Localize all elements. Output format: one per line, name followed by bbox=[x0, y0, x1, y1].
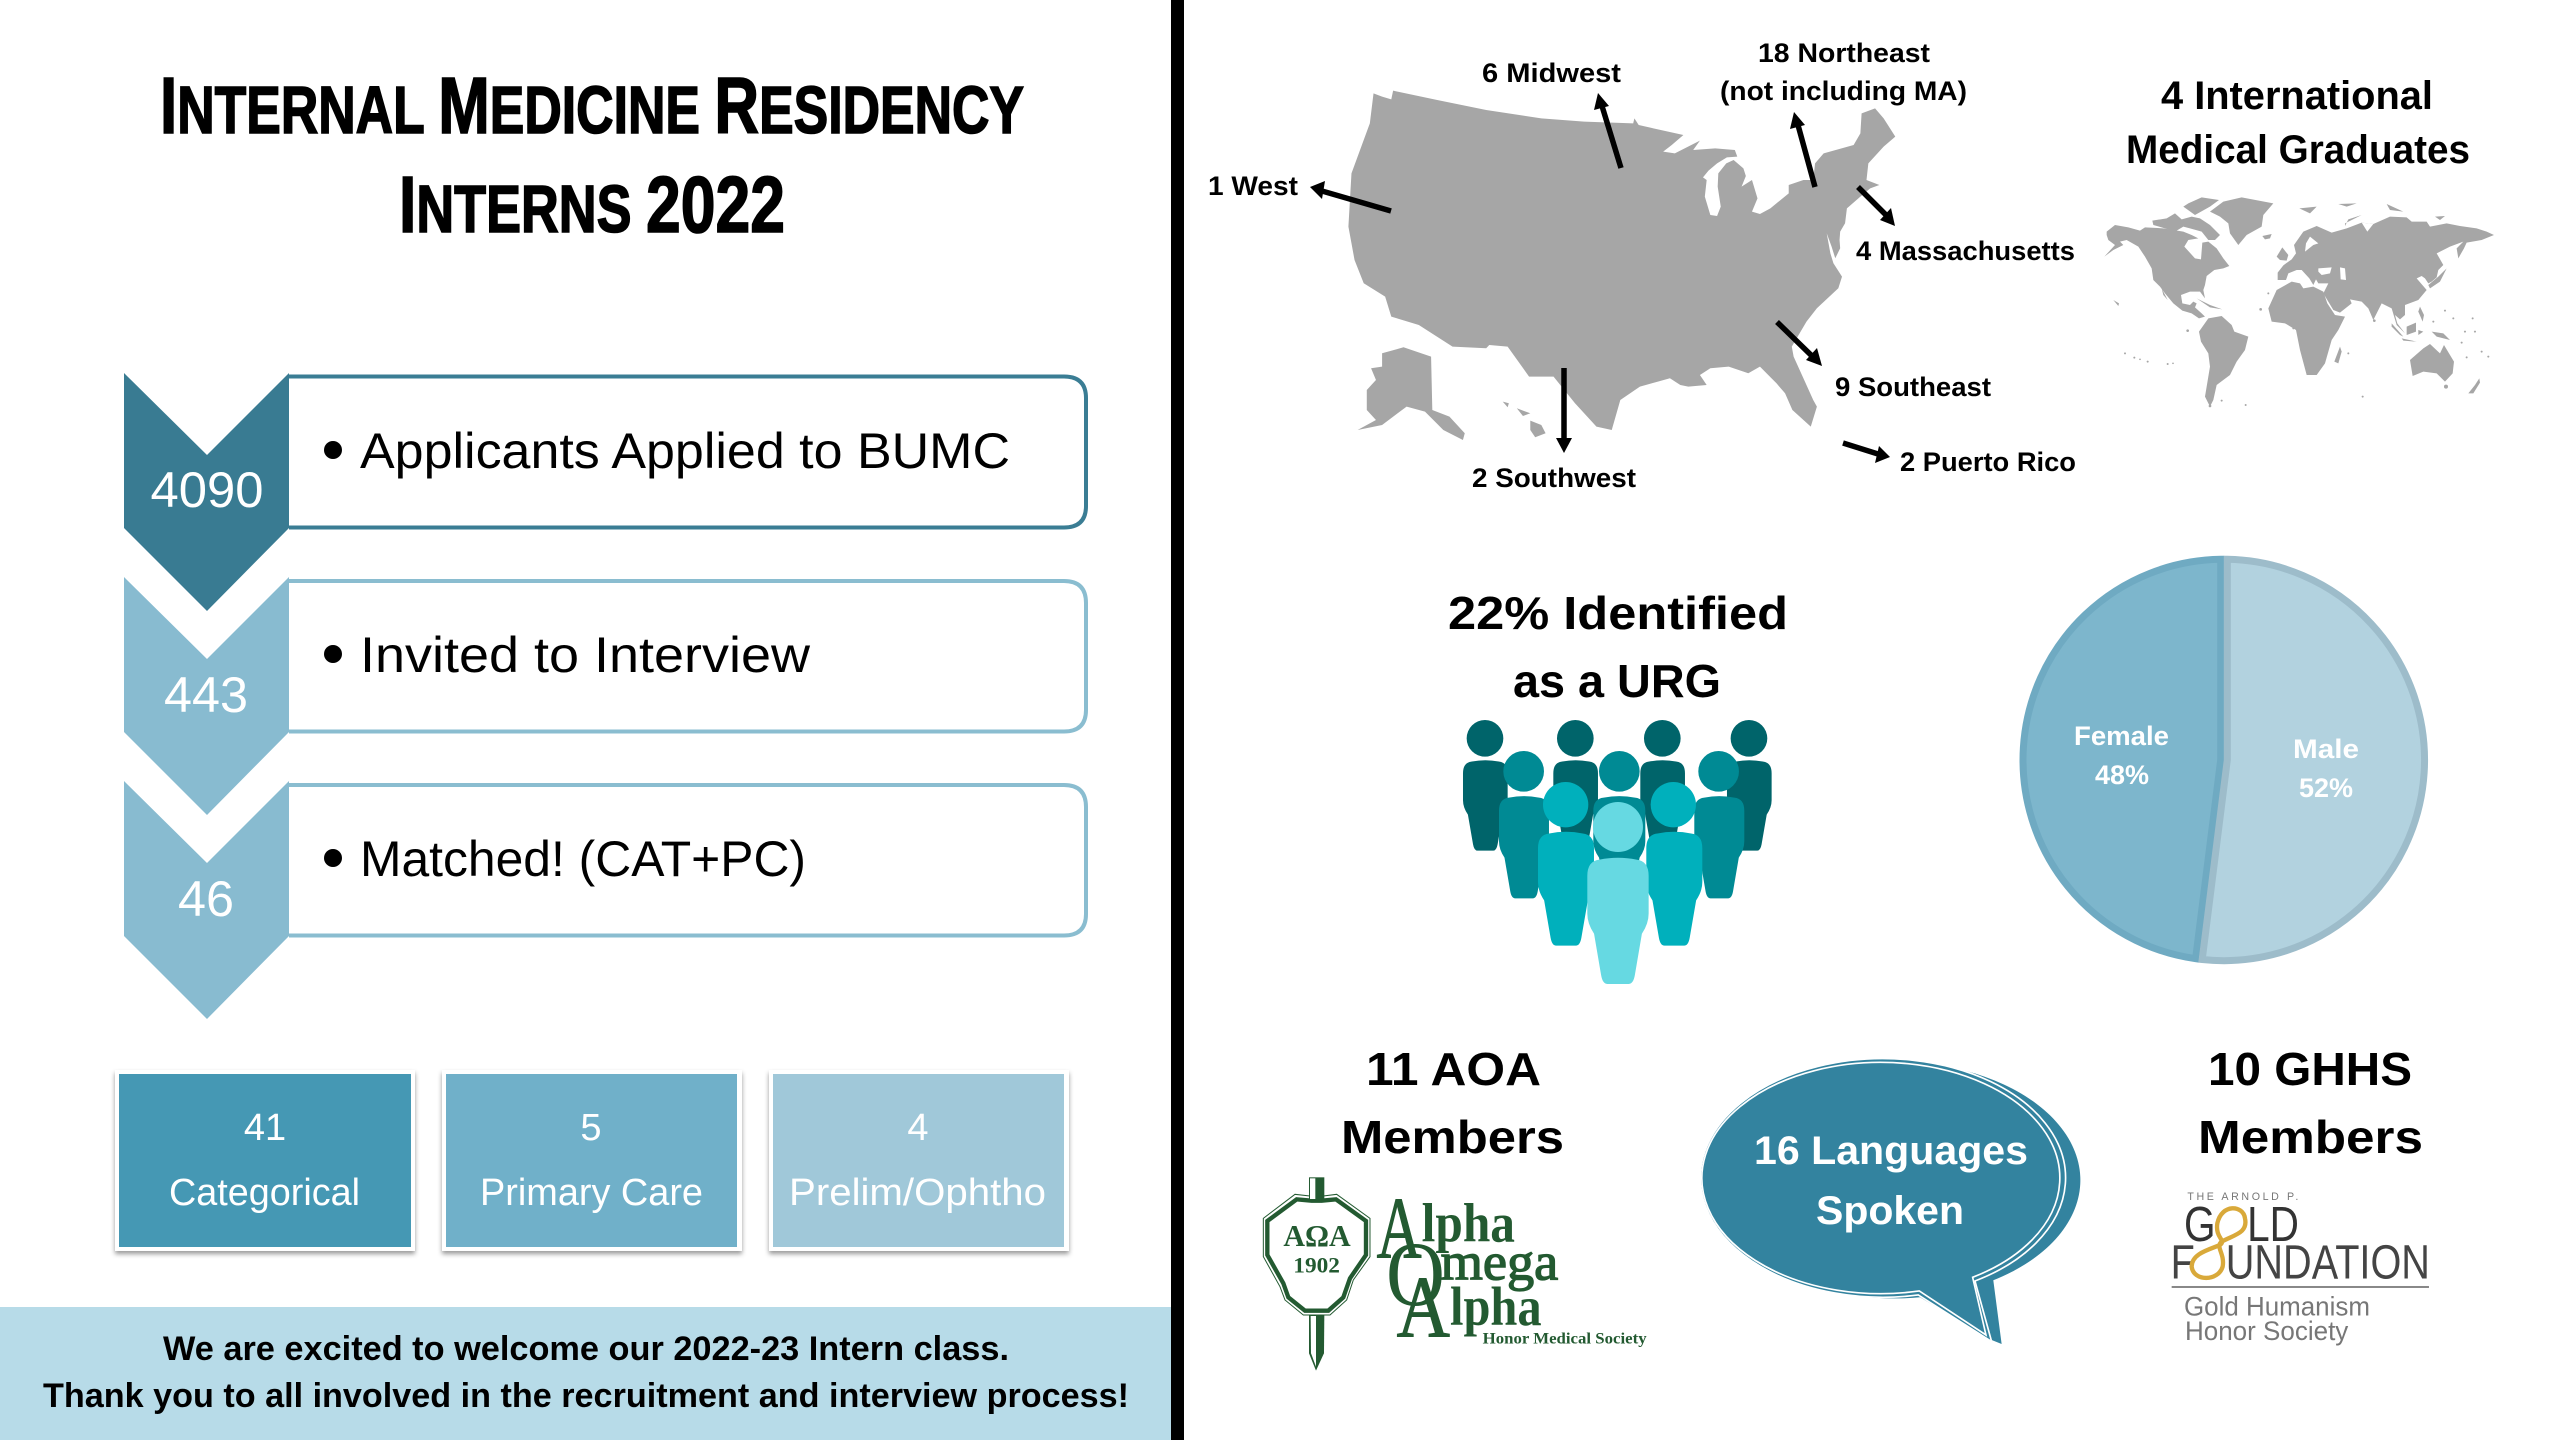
funnel step: matched: 46 bbox=[178, 871, 234, 927]
Eurasia, Africa and Oceania bbox=[2268, 203, 2494, 398]
heading: 4 International bbox=[2161, 74, 2433, 118]
region labels bbox=[1208, 38, 2076, 493]
label: male bbox=[2293, 734, 2359, 803]
heading: 11 AOA bbox=[1366, 1043, 1541, 1095]
footer welcome banner: Thank you to all involved in the recruitment and interview process! bbox=[43, 1377, 1129, 1415]
funnel step: applicants: Applicants Applied to BUMC bbox=[360, 423, 1010, 479]
logo: Gold Foundation: FOUNDATION bbox=[2171, 1235, 2430, 1289]
heading bbox=[2198, 1043, 2423, 1163]
vertical divider bbox=[1171, 0, 1184, 1440]
logo: Alpha Omega Alpha: Honor Medical Society bbox=[1483, 1330, 1647, 1347]
region labels: 9 Southeast bbox=[1835, 372, 1991, 402]
map of the United States bbox=[1348, 91, 1895, 440]
heading: Members bbox=[2198, 1111, 2423, 1163]
panel: international medical graduates bbox=[2104, 74, 2494, 407]
logo: Gold Foundation: THE ARNOLD P. bbox=[2187, 1191, 2298, 1203]
region labels: 4 Massachusetts bbox=[1856, 236, 2075, 266]
footer welcome banner: We are excited to welcome our 2022-23 Intern class. bbox=[163, 1330, 1009, 1368]
funnel step: matched bbox=[124, 781, 1086, 1019]
logo: Gold Foundation: Honor Society bbox=[2185, 1316, 2349, 1346]
arrow: Southwest bbox=[1556, 368, 1572, 453]
arrow: Puerto Rico bbox=[1843, 443, 1890, 463]
logo: Alpha Omega Alpha bbox=[1263, 1177, 1647, 1371]
funnel step: invited: 443 bbox=[164, 667, 248, 723]
logo: Gold Foundation bbox=[2171, 1191, 2430, 1346]
region labels: (not including MA) bbox=[1720, 76, 1967, 106]
logo: Alpha Omega Alpha: lpha bbox=[1450, 1276, 1542, 1337]
arrow: West bbox=[1310, 181, 1391, 211]
footer welcome banner bbox=[0, 1307, 1171, 1440]
region labels: 2 Puerto Rico bbox=[1900, 447, 2076, 477]
tile: prelim/ophtho bbox=[769, 1070, 1069, 1251]
panel: GHHS members bbox=[2171, 1043, 2430, 1346]
tile: categorical: 41 bbox=[244, 1107, 286, 1149]
pie chart: gender split bbox=[2023, 559, 2425, 961]
tile: prelim/ophtho: Prelim/Ophtho bbox=[789, 1172, 1046, 1214]
label: male: 52% bbox=[2299, 773, 2353, 803]
heading: 22% Identified bbox=[1448, 587, 1788, 639]
heading: Members bbox=[1341, 1111, 1564, 1163]
label: female bbox=[2074, 721, 2169, 790]
slice: male 52% bbox=[2202, 559, 2425, 961]
logo: Alpha Omega Alpha: AΩA bbox=[1283, 1219, 1351, 1253]
title: INTERNAL MEDICINE RESIDENCY bbox=[160, 61, 1024, 150]
logo: Gold Foundation: GOLD bbox=[2184, 1197, 2299, 1252]
logo: Alpha Omega Alpha: O bbox=[1386, 1223, 1445, 1325]
label: female: 48% bbox=[2095, 760, 2149, 790]
title: INTERNS 2022 bbox=[399, 160, 785, 249]
region labels: 1 West bbox=[1208, 171, 1298, 201]
panel: AOA members bbox=[1263, 1043, 1647, 1371]
heading: as a URG bbox=[1513, 655, 1721, 707]
heading: Medical Graduates bbox=[2126, 128, 2470, 172]
region labels: 18 Northeast bbox=[1758, 38, 1930, 68]
panel: residency funnel bbox=[0, 61, 1171, 1440]
bubble text bbox=[1754, 1129, 2028, 1233]
logo: Alpha Omega Alpha: mega bbox=[1441, 1231, 1558, 1291]
panel: US origin map bbox=[1208, 38, 2076, 493]
panel: under-represented groups bbox=[1448, 587, 1788, 984]
arrow: Northeast bbox=[1790, 112, 1815, 187]
logo: Alpha Omega Alpha: A bbox=[1377, 1179, 1422, 1277]
label: male: Male bbox=[2293, 734, 2359, 764]
logo: Gold Foundation: Gold Humanism bbox=[2184, 1292, 2370, 1322]
callout: languages speech bubble bbox=[1700, 1059, 2080, 1344]
bubble text: Spoken bbox=[1816, 1189, 1964, 1233]
tile: primary care: 5 bbox=[580, 1107, 602, 1149]
heading bbox=[2126, 74, 2470, 172]
funnel step: applicants bbox=[124, 373, 1086, 611]
logo: Alpha Omega Alpha: lpha bbox=[1422, 1193, 1515, 1254]
arrow: Midwest bbox=[1594, 93, 1621, 168]
Americas and Atlantic bbox=[2104, 197, 2288, 407]
arrow: Massachusetts bbox=[1858, 187, 1895, 226]
title bbox=[160, 61, 1024, 249]
tile: primary care: Primary Care bbox=[480, 1172, 703, 1214]
heading bbox=[1341, 1043, 1564, 1163]
region labels: 2 Southwest bbox=[1472, 463, 1636, 493]
funnel step: matched: Matched! (CAT+PC) bbox=[360, 831, 806, 887]
funnel step: applicants: 4090 bbox=[150, 462, 264, 518]
label: female: Female bbox=[2074, 721, 2169, 751]
arrow: Southeast bbox=[1777, 322, 1822, 366]
icon: group of people bbox=[1463, 720, 1772, 984]
bubble text: 16 Languages bbox=[1754, 1129, 2028, 1173]
tile: categorical bbox=[115, 1070, 415, 1251]
world map bbox=[2104, 197, 2494, 407]
logo: Alpha Omega Alpha: A bbox=[1397, 1259, 1450, 1357]
slice: female 48% bbox=[2023, 559, 2221, 959]
bubble shape bbox=[1700, 1059, 2080, 1344]
tile: categorical: Categorical bbox=[169, 1172, 360, 1214]
funnel step: invited bbox=[124, 577, 1086, 815]
heading: 10 GHHS bbox=[2208, 1043, 2412, 1095]
heading bbox=[1448, 587, 1788, 707]
tile: prelim/ophtho: 4 bbox=[907, 1107, 929, 1149]
logo: Alpha Omega Alpha: 1902 bbox=[1293, 1253, 1340, 1278]
funnel step: invited: Invited to Interview bbox=[360, 627, 811, 683]
region labels: 6 Midwest bbox=[1482, 58, 1621, 88]
tile: primary care bbox=[442, 1070, 742, 1251]
